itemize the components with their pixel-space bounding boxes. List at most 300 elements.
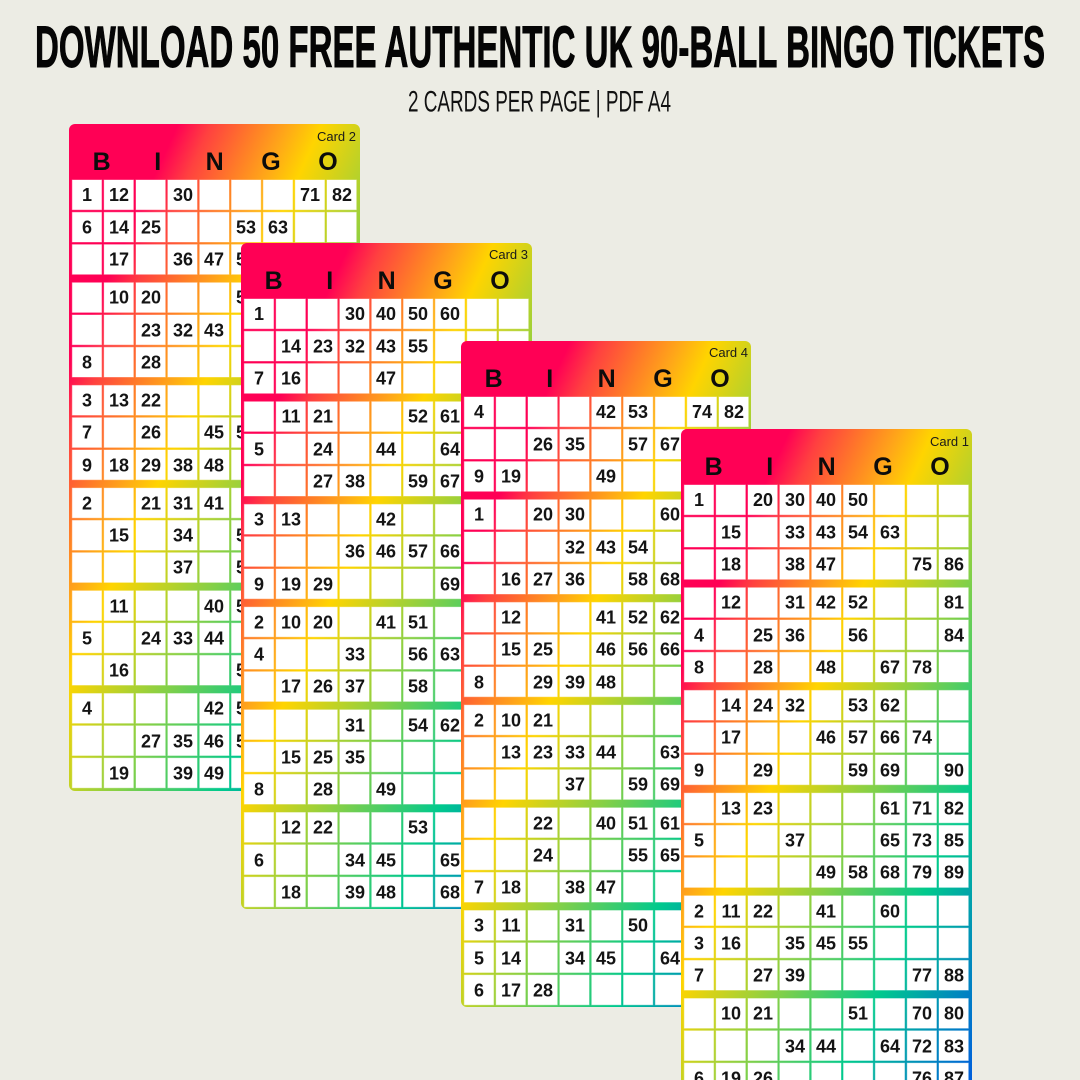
card 4 numbers: 32 <box>565 537 585 557</box>
card 4 BINGO header: O <box>710 365 730 393</box>
card 3 numbers: 63 <box>440 644 460 664</box>
card 1 numbers: 57 <box>848 727 868 747</box>
card 3 numbers: 61 <box>440 406 460 426</box>
card 3 numbers: 14 <box>281 336 301 356</box>
card 4 numbers: 20 <box>533 504 553 524</box>
card 1 numbers: 67 <box>880 657 900 677</box>
card 1 numbers: 18 <box>721 554 741 574</box>
card 1 numbers: 28 <box>753 657 773 677</box>
card 2 numbers: 30 <box>173 185 193 205</box>
card 1 BINGO header: O <box>930 453 950 481</box>
card 1 numbers: 16 <box>721 933 741 953</box>
card 3 numbers: 49 <box>376 779 396 799</box>
card 3 numbers: 64 <box>440 439 460 459</box>
card 2 numbers: 71 <box>300 185 320 205</box>
card 4 numbers: 59 <box>628 774 648 794</box>
card 1 numbers: 79 <box>912 862 932 882</box>
card 3 numbers: 54 <box>408 715 428 735</box>
card 1 numbers: 34 <box>785 1036 805 1056</box>
card 3 numbers: 4 <box>254 644 264 664</box>
card 1 numbers: 38 <box>785 554 805 574</box>
card 3 numbers: 6 <box>254 850 264 870</box>
card 1 numbers: 2 <box>694 901 704 921</box>
card 2 numbers: 56 <box>236 660 256 680</box>
card 1 numbers: 45 <box>816 933 836 953</box>
card 1 numbers: 43 <box>816 522 836 542</box>
card 4 numbers: 47 <box>596 877 616 897</box>
card 4 numbers: 63 <box>660 742 680 762</box>
card 2 numbers: 26 <box>141 422 161 442</box>
card 1 BINGO header: I <box>766 453 773 481</box>
card 1 numbers: 40 <box>816 490 836 510</box>
card 1 numbers: 75 <box>912 554 932 574</box>
card 3 numbers: 7 <box>254 368 264 388</box>
card 3 numbers: 62 <box>440 715 460 735</box>
card 3 numbers: 60 <box>440 304 460 324</box>
card 2 BINGO header: G <box>261 148 281 176</box>
card 3 numbers: 17 <box>281 676 301 696</box>
card 1 numbers: 82 <box>944 798 964 818</box>
card 4 BINGO header: B <box>485 365 503 393</box>
card 4 numbers: 31 <box>565 915 585 935</box>
card 4 numbers: 67 <box>660 434 680 454</box>
panel: bingo card 4 <box>461 341 751 1007</box>
card 1 numbers: 1 <box>694 490 704 510</box>
card 4 numbers: 48 <box>596 672 616 692</box>
card 2 numbers: 52 <box>236 525 256 545</box>
card 4 numbers: 34 <box>565 948 585 968</box>
card 1 numbers: 5 <box>694 830 704 850</box>
card 4 numbers: 38 <box>565 877 585 897</box>
card 4 BINGO header: I <box>546 365 553 393</box>
card 1 numbers: 80 <box>944 1003 964 1023</box>
card 4 numbers: 64 <box>660 948 680 968</box>
card 4 numbers: 44 <box>596 742 616 762</box>
card 1 numbers: 21 <box>753 1003 773 1023</box>
card 1 numbers: 11 <box>721 901 741 921</box>
card 3 numbers: 58 <box>408 676 428 696</box>
card 4 numbers: 60 <box>660 504 680 524</box>
card 2 numbers: 58 <box>236 249 256 269</box>
card 1 numbers: 49 <box>816 862 836 882</box>
card 1 numbers: 31 <box>785 592 805 612</box>
card 3 numbers: 35 <box>345 747 365 767</box>
card 1 numbers: 50 <box>848 490 868 510</box>
card 1 numbers: 24 <box>753 695 773 715</box>
card 2 numbers: 11 <box>109 596 129 616</box>
card 1 numbers: 88 <box>944 965 964 985</box>
card 3 numbers: 12 <box>281 817 301 837</box>
card 1 numbers: 65 <box>880 830 900 850</box>
card 3 numbers: 66 <box>440 541 460 561</box>
subtitle: 2 CARDS PER PAGE | PDF A4 <box>408 86 671 118</box>
card 1 numbers: 36 <box>785 625 805 645</box>
card 3 BINGO header: G <box>433 267 453 295</box>
card 2 numbers: 53 <box>236 217 256 237</box>
card 2 numbers: 38 <box>173 455 193 475</box>
card 3 numbers: 40 <box>376 304 396 324</box>
card 4 numbers: 66 <box>660 639 680 659</box>
card 4 numbers: 26 <box>533 434 553 454</box>
card 2 numbers: 35 <box>173 731 193 751</box>
card 1 numbers: 78 <box>912 657 932 677</box>
card 2 numbers: 19 <box>109 763 129 783</box>
card 2 numbers: 44 <box>204 628 224 648</box>
card 3 white cell grid <box>244 299 528 907</box>
card 3 numbers: 59 <box>408 471 428 491</box>
card 1 numbers: 48 <box>816 657 836 677</box>
card 4 numbers: 55 <box>628 845 648 865</box>
card 2 numbers: 12 <box>109 185 129 205</box>
card 4 numbers: 68 <box>660 569 680 589</box>
card 2 numbers: 14 <box>109 217 129 237</box>
card 1 numbers: 62 <box>880 695 900 715</box>
card 4 numbers: 53 <box>628 402 648 422</box>
card 4 numbers: 22 <box>533 813 553 833</box>
card 3 numbers: 65 <box>440 850 460 870</box>
card 1 numbers: 64 <box>880 1036 900 1056</box>
card 2 numbers: 13 <box>109 390 129 410</box>
card 1 numbers: 8 <box>694 657 704 677</box>
card 1 numbers: 14 <box>721 695 741 715</box>
card 2 numbers: 47 <box>204 249 224 269</box>
card 2 numbers: 43 <box>204 320 224 340</box>
card 3 numbers: 27 <box>313 471 333 491</box>
card 1 numbers: 73 <box>912 830 932 850</box>
card 4 numbers: 6 <box>474 980 484 1000</box>
card 3 numbers: 3 <box>254 509 264 529</box>
card 2 numbers: 57 <box>236 698 256 718</box>
card 2 numbers: 28 <box>141 352 161 372</box>
card 1 gradient background <box>681 429 972 1080</box>
card 2 numbers: 29 <box>141 455 161 475</box>
card 4 numbers: 40 <box>596 813 616 833</box>
card 4 numbers: 54 <box>628 537 648 557</box>
card 2 numbers: 36 <box>173 249 193 269</box>
card 1 numbers: 35 <box>785 933 805 953</box>
card 1 numbers: 42 <box>816 592 836 612</box>
card 2 numbers: 18 <box>109 455 129 475</box>
card 3 numbers: 15 <box>281 747 301 767</box>
card 1 numbers: 52 <box>848 592 868 612</box>
card 4 numbers: 56 <box>628 639 648 659</box>
card 3 numbers: 41 <box>376 612 396 632</box>
card 1 numbers: 85 <box>944 830 964 850</box>
card 2 numbers <box>82 185 352 783</box>
card 1 numbers: 77 <box>912 965 932 985</box>
card 1 label: Card 1 <box>930 434 969 449</box>
card 1 numbers: 68 <box>880 862 900 882</box>
card 4 numbers: 46 <box>596 639 616 659</box>
card 1 numbers: 44 <box>816 1036 836 1056</box>
card 3 numbers: 44 <box>376 439 396 459</box>
card 3 numbers: 67 <box>440 471 460 491</box>
card 1 numbers: 83 <box>944 1036 964 1056</box>
card 2 numbers: 59 <box>236 731 256 751</box>
card 4 numbers: 28 <box>533 980 553 1000</box>
card 3 BINGO header: N <box>378 267 396 295</box>
card 1 numbers: 59 <box>848 760 868 780</box>
card 3 numbers: 25 <box>313 747 333 767</box>
card 2 numbers: 22 <box>141 390 161 410</box>
card 1 numbers: 72 <box>912 1036 932 1056</box>
card 4 numbers: 25 <box>533 639 553 659</box>
card 3 BINGO header: O <box>490 267 510 295</box>
card 4 numbers: 8 <box>474 672 484 692</box>
card 3 numbers: 50 <box>408 304 428 324</box>
card 2 BINGO header: O <box>318 148 338 176</box>
card 1 numbers: 37 <box>785 830 805 850</box>
card 3 numbers: 16 <box>281 368 301 388</box>
card 4 numbers: 35 <box>565 434 585 454</box>
card 1 numbers: 27 <box>753 965 773 985</box>
card 2 numbers: 55 <box>236 596 256 616</box>
card 1 numbers: 53 <box>848 695 868 715</box>
card 1 numbers: 60 <box>880 901 900 921</box>
card 4 numbers: 52 <box>628 607 648 627</box>
card 2 numbers: 37 <box>173 557 193 577</box>
card 4 numbers: 23 <box>533 742 553 762</box>
card 2 BINGO header: N <box>206 148 224 176</box>
card 4 gradient background <box>461 341 751 1007</box>
card 4 numbers: 29 <box>533 672 553 692</box>
panel: bingo card 3 <box>241 243 532 909</box>
card 3 numbers: 51 <box>408 612 428 632</box>
card 4 numbers: 61 <box>660 813 680 833</box>
card 2 numbers: 48 <box>204 455 224 475</box>
card 2 numbers: 17 <box>109 249 129 269</box>
card 1 numbers: 54 <box>848 522 868 542</box>
card 2 numbers: 3 <box>82 390 92 410</box>
card 1 numbers: 74 <box>912 727 932 747</box>
card 3 numbers: 34 <box>345 850 365 870</box>
card 3 gradient background <box>241 243 532 909</box>
card 2 numbers: 32 <box>173 320 193 340</box>
card 4 numbers: 43 <box>596 537 616 557</box>
card 2 numbers: 46 <box>204 731 224 751</box>
card 1 numbers: 15 <box>721 522 741 542</box>
card 4 numbers: 50 <box>628 915 648 935</box>
card 3 numbers: 52 <box>408 406 428 426</box>
card 3 numbers: 30 <box>345 304 365 324</box>
card 1 white cell grid <box>684 485 968 1080</box>
card 4 numbers: 11 <box>501 915 521 935</box>
card 2 numbers: 16 <box>109 660 129 680</box>
card 1 numbers: 13 <box>721 798 741 818</box>
card 1 numbers: 9 <box>694 760 704 780</box>
card 4 numbers: 7 <box>474 877 484 897</box>
card 4 numbers: 10 <box>501 710 521 730</box>
card 1 numbers: 10 <box>721 1003 741 1023</box>
card 3 numbers: 46 <box>376 541 396 561</box>
card 1 numbers: 20 <box>753 490 773 510</box>
card 1 BINGO header: G <box>873 453 893 481</box>
card 4 numbers: 12 <box>501 607 521 627</box>
card 1 numbers: 69 <box>880 760 900 780</box>
card 2 numbers: 4 <box>82 698 92 718</box>
card 3 numbers: 10 <box>281 612 301 632</box>
card 3 numbers: 29 <box>313 574 333 594</box>
card 4 numbers: 36 <box>565 569 585 589</box>
card 4 numbers: 27 <box>533 569 553 589</box>
card 3 numbers: 39 <box>345 882 365 902</box>
card 1 numbers: 86 <box>944 554 964 574</box>
card 2 white cell grid <box>72 180 356 788</box>
card 3 numbers: 22 <box>313 817 333 837</box>
card 4 numbers: 45 <box>596 948 616 968</box>
card 1 numbers: 47 <box>816 554 836 574</box>
card 2 numbers: 51 <box>236 422 256 442</box>
card 4 numbers: 14 <box>501 948 521 968</box>
card 4 numbers: 41 <box>596 607 616 627</box>
card 2 numbers: 23 <box>141 320 161 340</box>
card 3 numbers: 68 <box>440 882 460 902</box>
card 3 numbers: 47 <box>376 368 396 388</box>
card 3 BINGO header: I <box>326 267 333 295</box>
card 4 numbers: 21 <box>533 710 553 730</box>
card 3 numbers: 48 <box>376 882 396 902</box>
card 4 numbers: 51 <box>628 813 648 833</box>
card 1 numbers: 58 <box>848 862 868 882</box>
card 1 numbers: 90 <box>944 760 964 780</box>
card 2 numbers: 82 <box>332 185 352 205</box>
card 2 BINGO header: B <box>93 148 111 176</box>
card 1 numbers: 81 <box>944 592 964 612</box>
card 3 numbers: 23 <box>313 336 333 356</box>
card 3 numbers: 11 <box>281 406 301 426</box>
card 3 numbers: 38 <box>345 471 365 491</box>
card 4 numbers: 1 <box>474 504 484 524</box>
card 3 numbers: 36 <box>345 541 365 561</box>
card 4 numbers: 65 <box>660 845 680 865</box>
card 1 numbers: 41 <box>816 901 836 921</box>
card 2 numbers: 20 <box>141 287 161 307</box>
card 4 numbers: 19 <box>501 466 521 486</box>
card 3 numbers: 56 <box>408 644 428 664</box>
card 3 numbers: 5 <box>254 439 264 459</box>
card 4 numbers: 30 <box>565 504 585 524</box>
card 4 numbers: 4 <box>474 402 484 422</box>
card 3 numbers: 13 <box>281 509 301 529</box>
card 1 numbers: 3 <box>694 933 704 953</box>
card 4 numbers: 57 <box>628 434 648 454</box>
card 2 numbers: 1 <box>82 185 92 205</box>
card 3 numbers: 53 <box>408 817 428 837</box>
card 2 numbers: 2 <box>82 493 92 513</box>
card 4 numbers: 39 <box>565 672 585 692</box>
card 2 numbers: 8 <box>82 352 92 372</box>
card 2 numbers: 63 <box>268 217 288 237</box>
card 3 numbers: 8 <box>254 779 264 799</box>
card 2 numbers: 15 <box>109 525 129 545</box>
card 2 numbers: 34 <box>173 525 193 545</box>
card 2 gradient background <box>69 124 360 791</box>
card 2 numbers: 49 <box>204 763 224 783</box>
card 2 numbers: 5 <box>82 628 92 648</box>
card 4 numbers: 13 <box>501 742 521 762</box>
card 3 numbers: 37 <box>345 676 365 696</box>
card 1 numbers <box>694 490 964 1080</box>
card 4 numbers: 42 <box>596 402 616 422</box>
card 3 numbers: 57 <box>408 541 428 561</box>
card 3 numbers: 24 <box>313 439 333 459</box>
card 3 numbers: 9 <box>254 574 264 594</box>
card 4 numbers: 24 <box>533 845 553 865</box>
card 3 numbers <box>254 304 460 902</box>
card 4 BINGO header: G <box>653 365 673 393</box>
card 1 numbers: 29 <box>753 760 773 780</box>
card 1 numbers: 55 <box>848 933 868 953</box>
card 4 numbers: 74 <box>692 402 712 422</box>
card 1 BINGO header: B <box>705 453 723 481</box>
card 4 numbers: 33 <box>565 742 585 762</box>
card 4 numbers: 58 <box>628 569 648 589</box>
card 3 numbers: 55 <box>408 336 428 356</box>
card 2 numbers: 27 <box>141 731 161 751</box>
card 1 numbers: 61 <box>880 798 900 818</box>
card 2 numbers: 21 <box>141 493 161 513</box>
card 4 numbers <box>474 402 744 1000</box>
card 3 numbers: 26 <box>313 676 333 696</box>
card 2 numbers: 42 <box>204 698 224 718</box>
card 3 numbers: 42 <box>376 509 396 529</box>
card 1 numbers: 51 <box>848 1003 868 1023</box>
card 1 numbers: 89 <box>944 862 964 882</box>
card 3 label: Card 3 <box>489 247 528 262</box>
card 1 numbers: 4 <box>694 625 704 645</box>
card 2 numbers: 39 <box>173 763 193 783</box>
card 1 numbers: 30 <box>785 490 805 510</box>
card 1 numbers: 63 <box>880 522 900 542</box>
card 1 numbers: 33 <box>785 522 805 542</box>
card 3 numbers: 21 <box>313 406 333 426</box>
card 2 numbers: 24 <box>141 628 161 648</box>
card 1 numbers: 66 <box>880 727 900 747</box>
card 2 numbers: 7 <box>82 422 92 442</box>
panel: bingo card 2 <box>69 124 360 791</box>
card 4 label: Card 4 <box>709 345 748 360</box>
card 1 numbers: 22 <box>753 901 773 921</box>
card 4 numbers: 18 <box>501 877 521 897</box>
card 1 numbers: 32 <box>785 695 805 715</box>
card 1 numbers: 23 <box>753 798 773 818</box>
card 1 numbers: 46 <box>816 727 836 747</box>
card 2 BINGO header: I <box>154 148 161 176</box>
card 2 label: Card 2 <box>317 129 356 144</box>
card 3 numbers: 20 <box>313 612 333 632</box>
card 2 numbers: 54 <box>236 557 256 577</box>
card 4 numbers: 69 <box>660 774 680 794</box>
card 1 numbers: 56 <box>848 625 868 645</box>
card 4 numbers: 49 <box>596 466 616 486</box>
card 2 numbers: 10 <box>109 287 129 307</box>
card 3 numbers: 1 <box>254 304 264 324</box>
card 3 numbers: 69 <box>440 574 460 594</box>
card 1 BINGO header: N <box>818 453 836 481</box>
card 4 numbers: 15 <box>501 639 521 659</box>
card 1 numbers: 25 <box>753 625 773 645</box>
card 3 numbers: 28 <box>313 779 333 799</box>
card 4 white cell grid <box>464 397 748 1005</box>
panel: bingo card 1 <box>681 429 972 1080</box>
card 4 numbers: 9 <box>474 466 484 486</box>
card 4 numbers: 3 <box>474 915 484 935</box>
card 3 numbers: 2 <box>254 612 264 632</box>
card 2 numbers: 31 <box>173 493 193 513</box>
card 1 numbers: 84 <box>944 625 964 645</box>
card 3 numbers: 31 <box>345 715 365 735</box>
card 3 numbers: 43 <box>376 336 396 356</box>
